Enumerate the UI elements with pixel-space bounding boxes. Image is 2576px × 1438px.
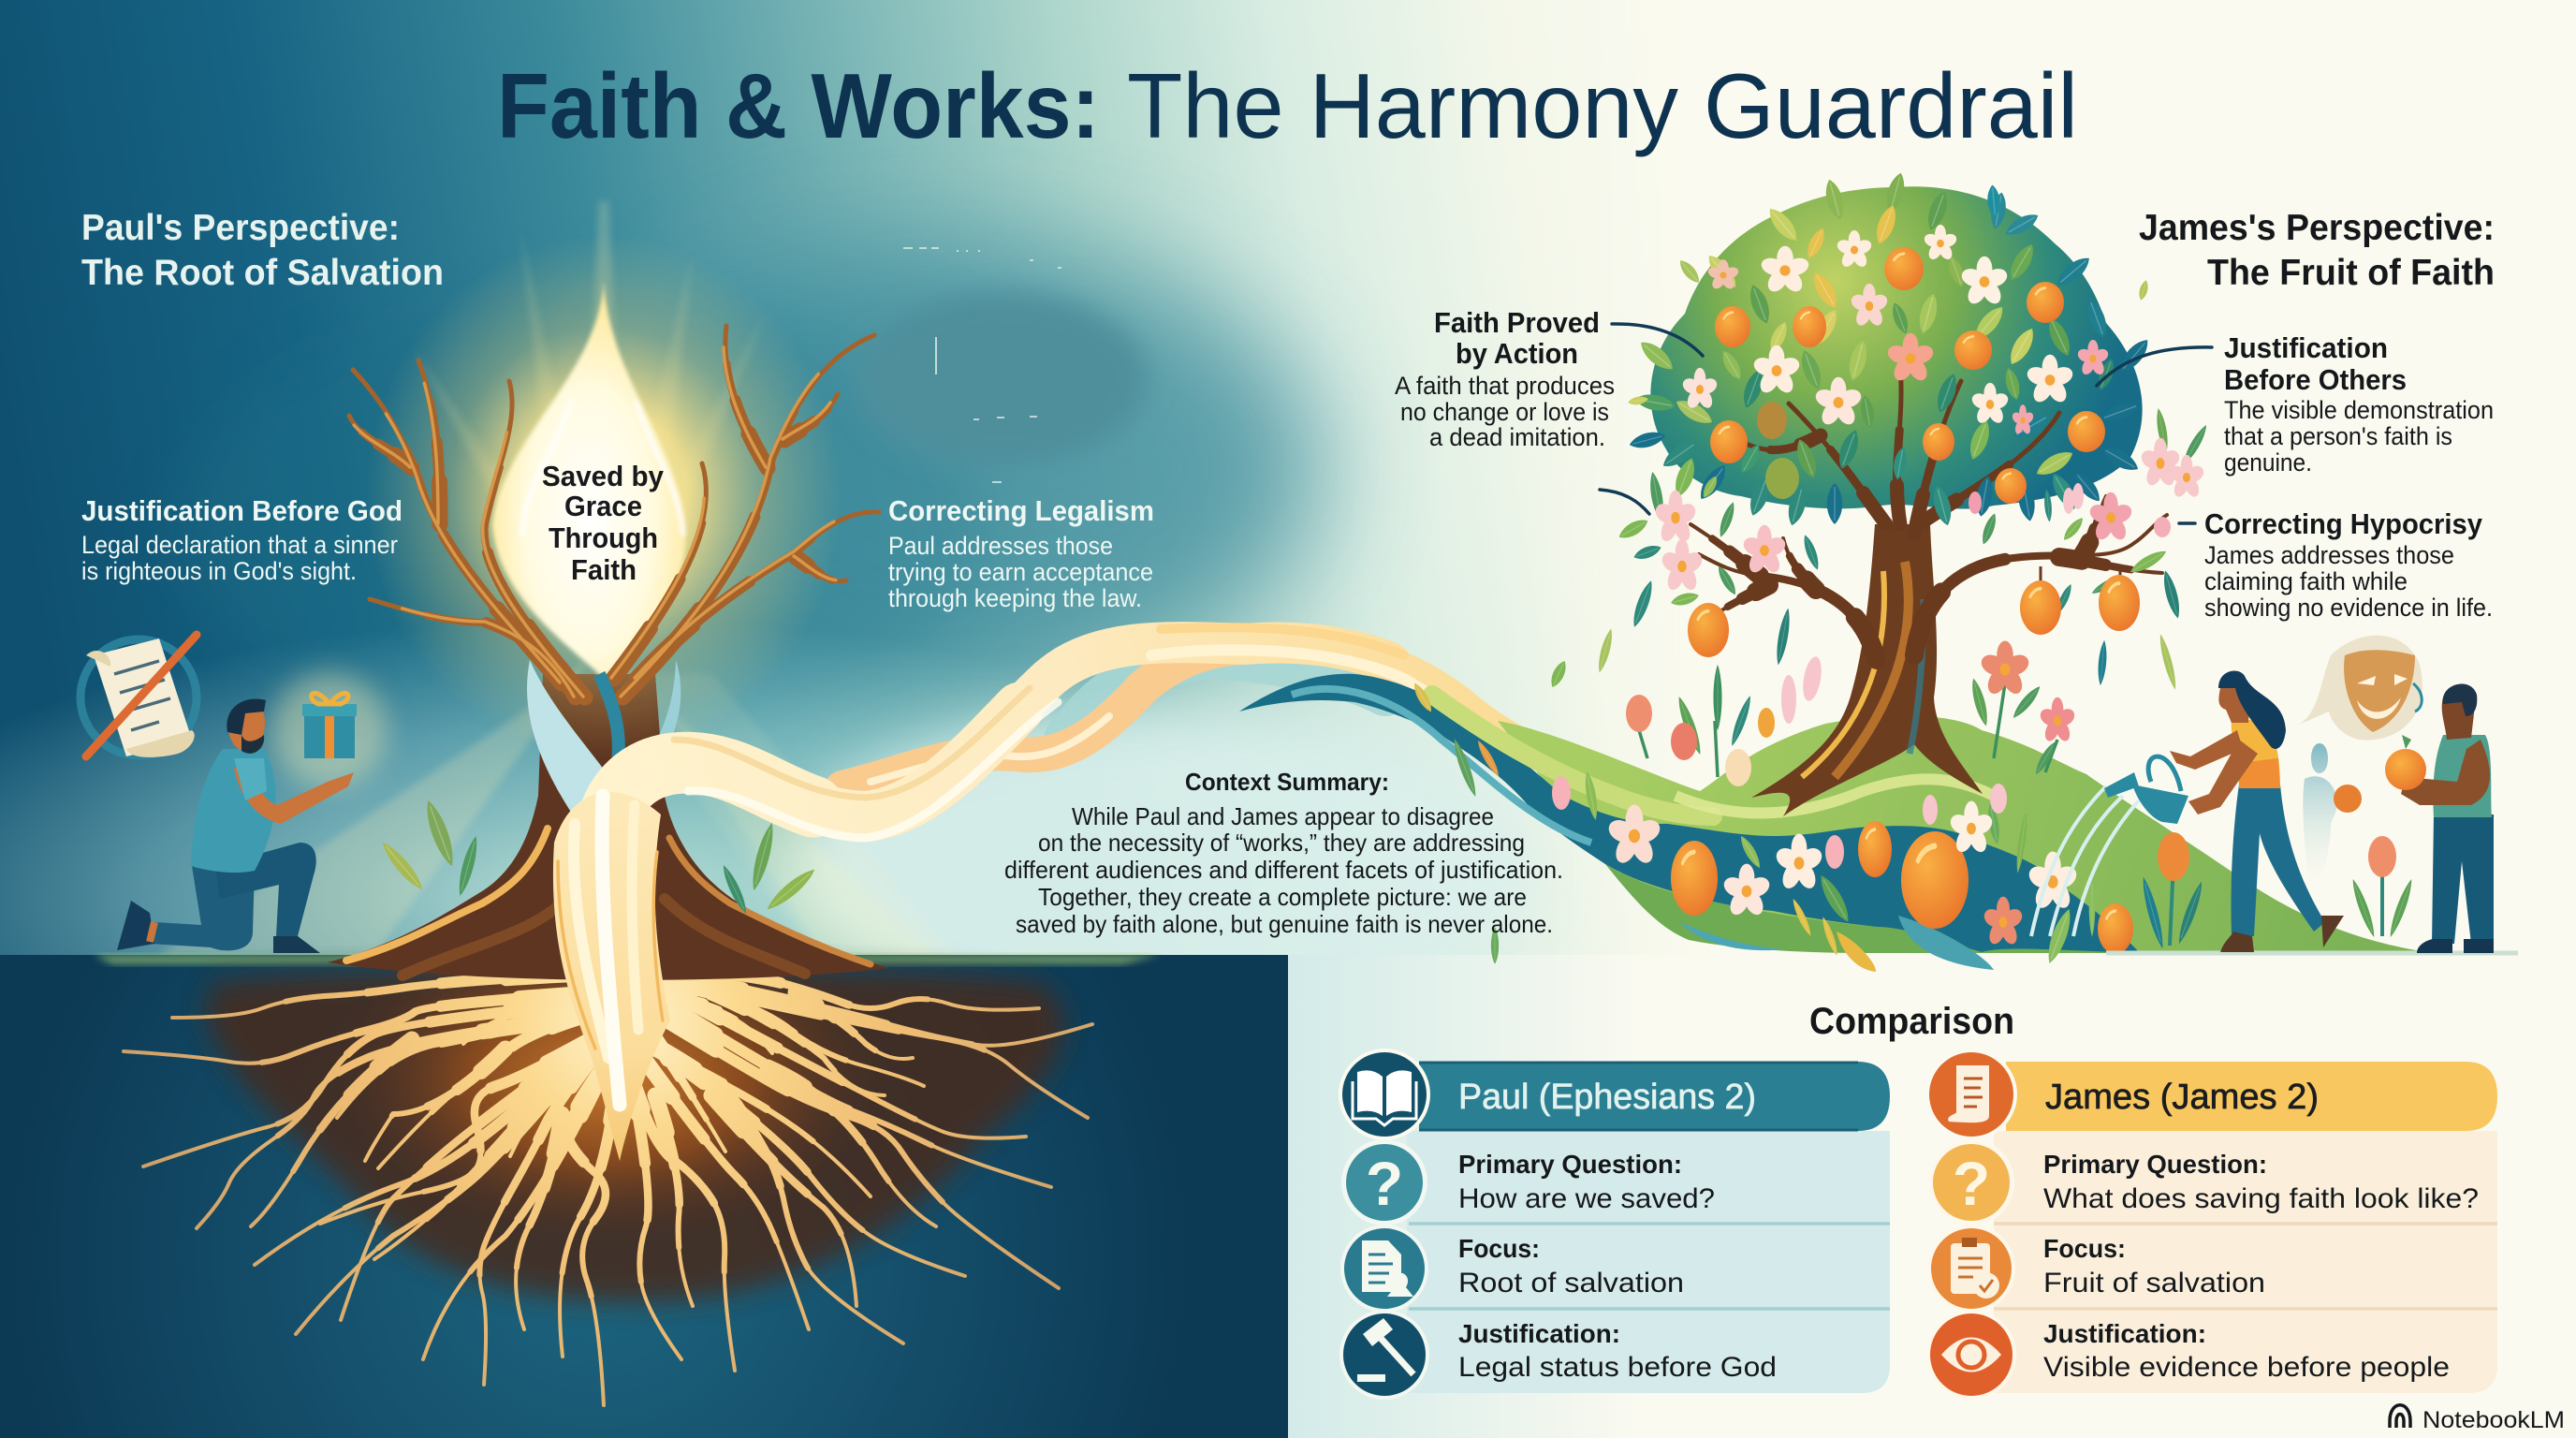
comparison heading: Comparison	[1809, 1001, 2014, 1042]
crown blossoms	[1681, 225, 2110, 436]
row text: focus	[1458, 1234, 1684, 1299]
text block: correcting hypocrisy	[2204, 507, 2493, 622]
text block: faith proved by action	[1395, 306, 1615, 451]
James's perspective heading	[2139, 208, 2495, 293]
torso	[191, 749, 275, 873]
row text: justification: Legal status before God	[1458, 1352, 1777, 1383]
NotebookLM logo and wordmark: NotebookLM	[2422, 1407, 2565, 1433]
text block: faith proved by action: no change or love is	[1400, 398, 1609, 426]
teal stream body	[1239, 674, 2139, 952]
text block: correcting legalism	[888, 494, 1154, 612]
tulips by the people	[2139, 832, 2416, 950]
text block: context summary: saved by faith alone, but genuine faith is never alone.	[1016, 910, 1553, 938]
water arcs	[2031, 786, 2139, 936]
Paul's perspective heading	[81, 208, 444, 293]
text block: saved by grace through faith: Saved by	[542, 460, 665, 492]
shirt	[2232, 719, 2280, 788]
text block: justification before others	[2224, 331, 2494, 477]
head	[228, 704, 265, 752]
hill and stream of fruit	[1239, 674, 2434, 972]
watering can	[2104, 756, 2188, 824]
title: The Harmony Guardrail	[1127, 54, 2078, 157]
row text: primary question: How are we saved?	[1458, 1183, 1715, 1214]
row text: focus: Focus:	[2043, 1234, 2126, 1263]
text block: justification before others: Before Others	[2224, 363, 2407, 396]
Paul column body	[1407, 1131, 1890, 1393]
legs	[2231, 785, 2325, 936]
row text: justification	[2043, 1319, 2450, 1383]
Paul's perspective heading: Paul's Perspective:	[81, 208, 400, 248]
text block: justification before others: genuine.	[2224, 448, 2312, 477]
text block: context summary: different audiences and different facets of justification.	[1004, 856, 1563, 884]
row text: justification: Justification:	[2043, 1319, 2206, 1348]
arms	[2170, 730, 2243, 770]
text block: context summary	[1004, 768, 1563, 938]
icon: question mark	[1928, 1139, 2014, 1225]
icon: question mark: ?	[1366, 1149, 1403, 1218]
figure: faded onlooker	[2303, 743, 2362, 880]
crown leaves	[1627, 171, 2153, 527]
right tree: lower branch leaves, fruit and blossoms	[1616, 407, 2210, 666]
icon: eye	[1926, 1310, 2016, 1400]
row text: primary question: What does saving faith look like?	[2043, 1183, 2479, 1214]
text block: correcting hypocrisy: Correcting Hypocrisy	[2204, 507, 2483, 540]
ribbon around trunk	[527, 660, 681, 819]
row text: primary question	[2043, 1150, 2479, 1214]
garden plants and falling petals	[1547, 627, 2416, 950]
right tree: foliage crown	[1627, 171, 2153, 534]
figure: woman watering the garden	[2031, 670, 2344, 952]
row text: primary question: Primary Question:	[2043, 1150, 2267, 1179]
text block: saved by grace through faith: Faith	[571, 553, 637, 586]
row text: justification: Visible evidence before people	[2043, 1352, 2450, 1383]
icon: question mark	[1341, 1139, 1427, 1225]
text block: justification before others: that a person's faith is	[2224, 422, 2452, 450]
mask thought bubble	[2299, 636, 2422, 741]
panel: James column	[1925, 1049, 2497, 1400]
title: Faith & Works:	[497, 54, 1100, 157]
small sprouts	[378, 798, 819, 916]
text block: justification before God	[81, 494, 402, 585]
text block: context summary: Context Summary:	[1185, 768, 1389, 796]
crown fruit	[1710, 247, 2105, 504]
James header pill: James (James 2)	[2045, 1078, 2319, 1117]
icon: gavel	[1339, 1310, 1429, 1400]
icon: open book	[1339, 1049, 1430, 1140]
James's perspective heading: The Fruit of Faith	[2207, 253, 2495, 293]
icon: question mark: ?	[1953, 1149, 1990, 1218]
text block: saved by grace through faith	[542, 460, 665, 586]
row text: focus	[2043, 1234, 2265, 1299]
icon: crossed-out scroll of law	[80, 635, 197, 757]
text block: correcting hypocrisy: showing no evidence in life.	[2204, 594, 2493, 622]
figure: kneeling man receiving gift	[117, 699, 354, 953]
text block: context summary: While Paul and James appear to disagree	[1072, 802, 1494, 830]
James column body	[1994, 1131, 2497, 1393]
left tree: trunk and branches	[328, 234, 889, 980]
front leg	[215, 843, 316, 936]
left tree: root system	[124, 964, 1092, 1405]
text block: context summary: on the necessity of “works,” they are addressing	[1038, 829, 1525, 857]
text block: faith proved by action: by Action	[1456, 337, 1578, 370]
text block: justification before God: Justification Before God	[81, 494, 402, 527]
text block: faith proved by action: A faith that produces	[1395, 372, 1615, 400]
text block: faith proved by action: Faith Proved	[1434, 306, 1600, 339]
text block: saved by grace through faith: Grace	[564, 490, 642, 522]
ground shadow line	[2106, 951, 2518, 955]
James's perspective heading: James's Perspective:	[2139, 208, 2495, 248]
Paul header pill: Paul (Ephesians 2)	[1458, 1078, 1756, 1117]
text block: correcting hypocrisy: claiming faith while	[2204, 567, 2408, 595]
glowing central stem	[553, 792, 670, 1161]
panel: Paul column	[1339, 1049, 1890, 1400]
row text: primary question	[1458, 1150, 1715, 1214]
James header pill	[2006, 1062, 2497, 1131]
head and hair	[2218, 688, 2251, 723]
callout leader lines	[1600, 324, 2212, 523]
row text: focus: Fruit of salvation	[2043, 1268, 2265, 1299]
flowing ribbons linking faith and works	[602, 627, 1582, 946]
text block: justification before others: The visible demonstration	[2224, 396, 2494, 424]
green hill	[1498, 716, 2434, 953]
icon: document with stamp	[1340, 1225, 1428, 1313]
text block: correcting legalism: Correcting Legalism	[888, 494, 1154, 527]
text block: saved by grace through faith: Through	[549, 521, 658, 554]
icon: glowing gift	[271, 672, 388, 788]
radiant flame	[492, 281, 685, 679]
text block: faith proved by action: a dead imitation.	[1429, 423, 1605, 451]
row text: justification	[1458, 1319, 1777, 1383]
Paul header pill	[1419, 1062, 1890, 1131]
icon: clipboard check	[1927, 1225, 2015, 1313]
row text: justification: Justification:	[1458, 1319, 1620, 1348]
row text: primary question: Primary Question:	[1458, 1150, 1682, 1179]
main cream ribbon	[602, 642, 1582, 946]
underground soil panel	[0, 908, 1288, 1438]
arm	[234, 763, 354, 824]
text block: correcting hypocrisy: James addresses those	[2204, 541, 2454, 569]
text block: correcting legalism: trying to earn acceptance	[888, 558, 1153, 586]
teal under-ribbon	[1067, 656, 1385, 740]
text block: justification before God: is righteous in God's sight.	[81, 557, 357, 585]
back leg	[150, 866, 255, 950]
branches	[347, 325, 879, 697]
row text: focus: Focus:	[1458, 1234, 1540, 1263]
text block: correcting legalism: Paul addresses those	[888, 532, 1113, 560]
text block: context summary: Together, they create a complete picture: we are	[1038, 883, 1527, 911]
right tree: trunk and lower branches	[1690, 496, 2167, 816]
text block: justification before God: Legal declaration that a sinner	[81, 531, 398, 559]
title	[497, 54, 2078, 157]
Paul's perspective heading: The Root of Salvation	[81, 253, 444, 293]
stream leaves and fruits	[1411, 681, 2133, 965]
light beams behind left tree	[159, 201, 955, 955]
text block: correcting legalism: through keeping the law.	[888, 584, 1142, 612]
peach strand	[842, 646, 1264, 788]
text block: justification before others: Justification	[2224, 331, 2388, 364]
figure: man holding fruit	[2385, 684, 2494, 953]
row text: focus: Root of salvation	[1458, 1268, 1684, 1299]
icon: scroll	[1925, 1049, 2017, 1140]
